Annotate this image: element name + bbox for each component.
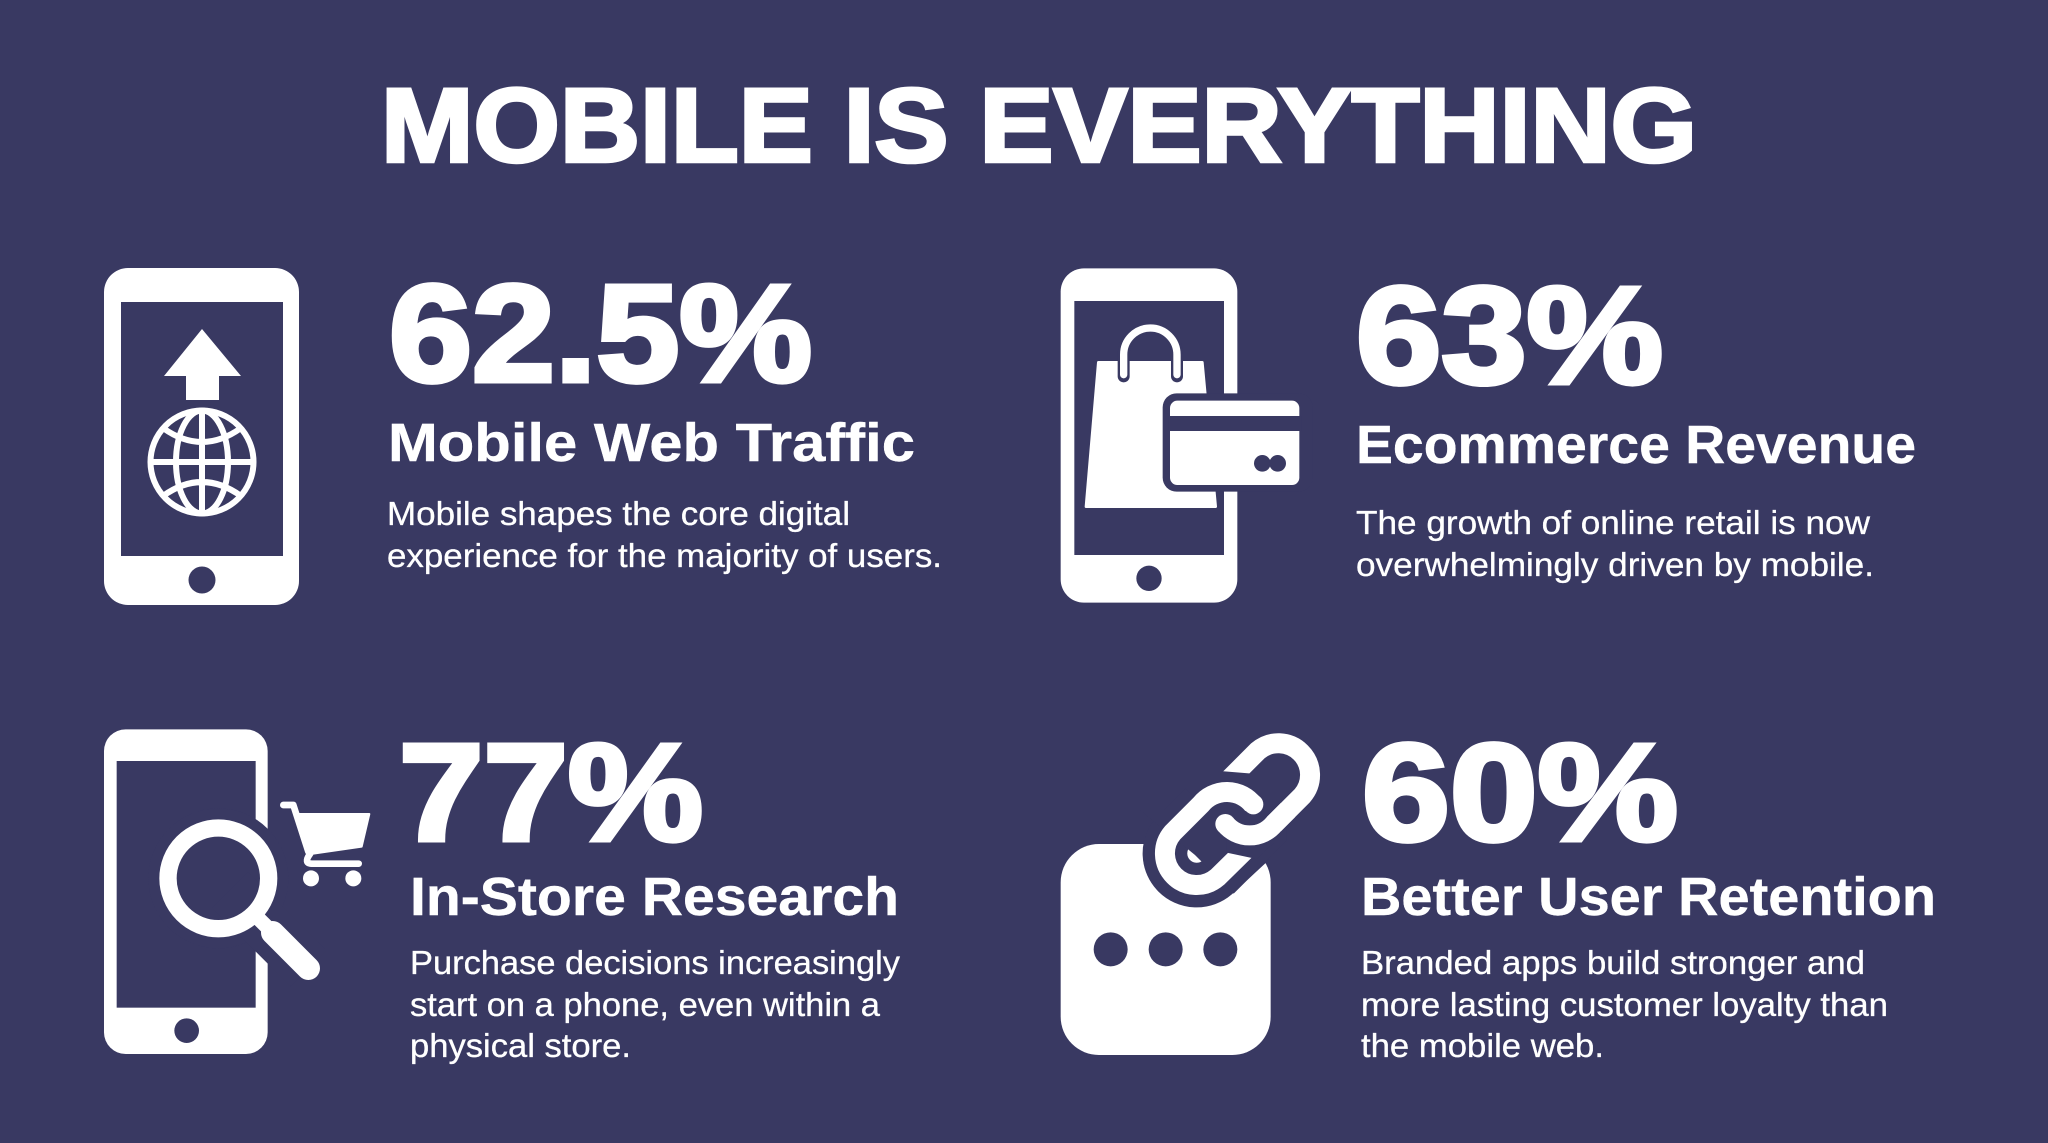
description: overwhelmingly driven by mobile. bbox=[1356, 546, 1874, 583]
title: MOBILE IS EVERYTHING bbox=[381, 68, 1697, 184]
icon: phone with shopping bag and credit card bbox=[1061, 268, 1313, 603]
stat: 77% bbox=[399, 716, 703, 870]
icon: phone with magnifier and cart bbox=[104, 729, 369, 1054]
description bbox=[1361, 944, 1888, 1064]
description: more lasting customer loyalty than bbox=[1361, 986, 1888, 1023]
description: the mobile web. bbox=[1361, 1027, 1604, 1064]
icon: app tile with chain link bbox=[1061, 743, 1310, 1055]
stat: 63% bbox=[1356, 259, 1663, 413]
panel: mobile web traffic bbox=[104, 257, 942, 605]
panel: ecommerce revenue bbox=[1061, 259, 1916, 603]
heading: In-Store Research bbox=[410, 867, 899, 927]
description: physical store. bbox=[410, 1027, 631, 1064]
heading: Mobile Web Traffic bbox=[388, 413, 915, 473]
panel: in-store research bbox=[104, 716, 901, 1064]
heading: Better User Retention bbox=[1361, 867, 1936, 927]
stat: 60% bbox=[1362, 716, 1678, 870]
panel: better user retention bbox=[1061, 716, 1936, 1064]
description bbox=[1356, 504, 1874, 583]
description bbox=[387, 495, 942, 574]
icon: phone with arrow and globe bbox=[104, 268, 299, 605]
icon: cart bbox=[283, 805, 369, 886]
description: Branded apps build stronger and bbox=[1361, 944, 1865, 981]
stat: 62.5% bbox=[389, 257, 812, 411]
description: experience for the majority of users. bbox=[387, 537, 942, 574]
description: Purchase decisions increasingly bbox=[410, 944, 901, 981]
heading: Ecommerce Revenue bbox=[1356, 415, 1916, 475]
description: Mobile shapes the core digital bbox=[387, 495, 850, 532]
description bbox=[410, 944, 901, 1064]
description: start on a phone, even within a bbox=[410, 986, 881, 1023]
description: The growth of online retail is now bbox=[1356, 504, 1870, 541]
